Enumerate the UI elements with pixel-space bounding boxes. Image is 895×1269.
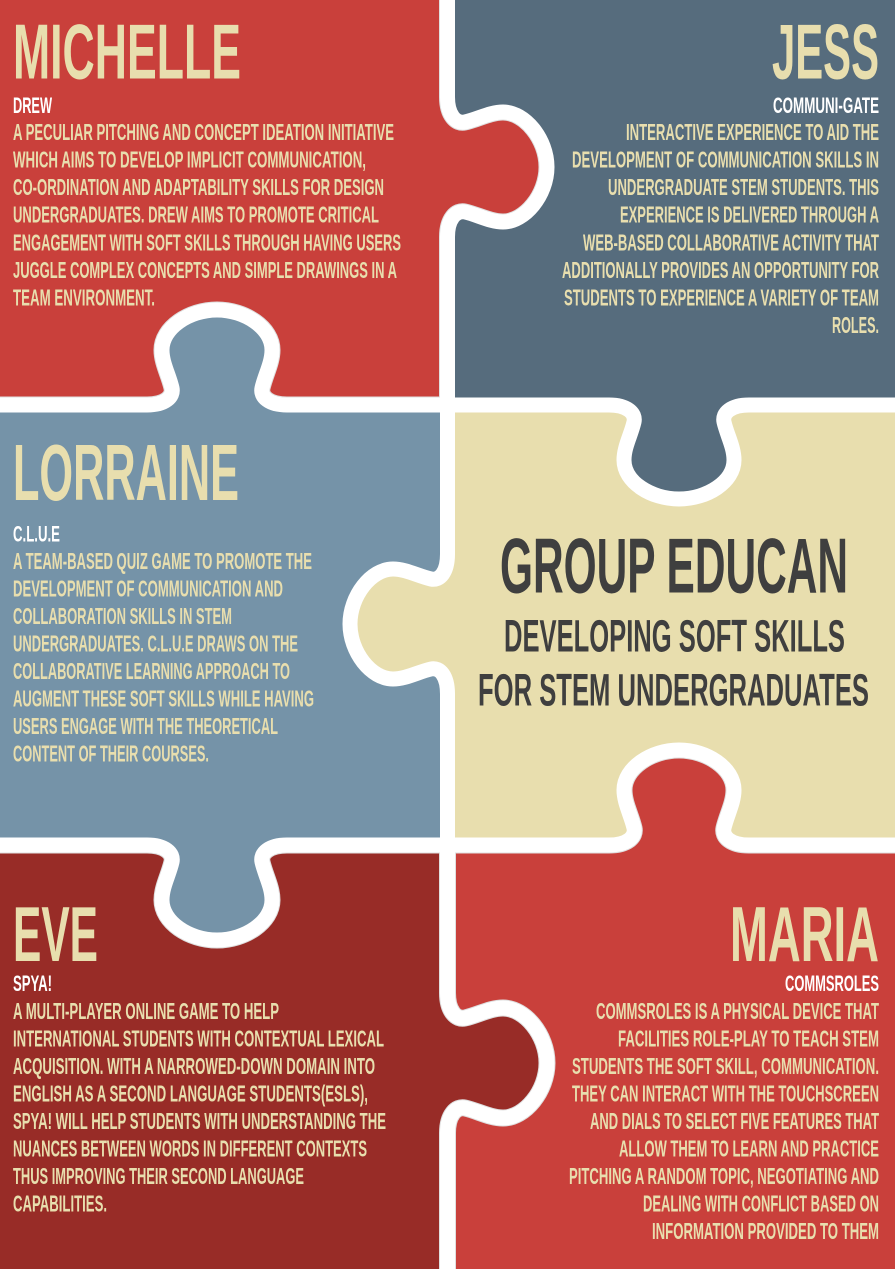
description: Drew: ENGAGEMENT WITH SOFT SKILLS THROUGH HAVING USERS	[13, 229, 401, 255]
description: Spya!	[13, 998, 386, 1216]
description: C.L.U.E: UNDERGRADUATES. C.L.U.E DRAWS ON THE	[13, 630, 298, 656]
panel: Michelle	[13, 7, 401, 310]
panel: Lorraine	[13, 428, 314, 766]
description: Spya!: ACQUISITION. WITH A NARROWED-DOWN DOMAIN INTO	[13, 1053, 375, 1079]
description: C.L.U.E: AUGMENT THESE SOFT SKILLS WHILE HAVING	[13, 686, 314, 712]
description: Drew: UNDERGRADUATES. DREW AIMS TO PROMOTE CRITICAL	[13, 202, 379, 228]
heading: Eve: EVE	[13, 890, 98, 978]
description: C.L.U.E: COLLABORATIVE LEARNING APPROACH TO	[13, 658, 290, 684]
description: Drew: A PECULIAR PITCHING AND CONCEPT IDEATION INITIATIVE	[13, 119, 394, 145]
description: Spya!: A MULTI-PLAYER ONLINE GAME TO HELP	[13, 998, 279, 1024]
description: Drew: TEAM ENVIRONMENT.	[13, 284, 155, 310]
panel: Maria	[569, 890, 879, 1244]
description: Spya!: CAPABILITIES.	[13, 1190, 107, 1216]
description: Drew: CO-ORDINATION AND ADAPTABILITY SKILLS FOR DESIGN	[13, 174, 384, 200]
description: Drew: WHICH AIMS TO DEVELOP IMPLICIT COMMUNICATION,	[13, 147, 366, 173]
piece: Michelle red	[0, 0, 547, 405]
description: Spya!: SPYA! WILL HELP STUDENTS WITH UNDERSTANDING THE	[13, 1108, 386, 1134]
project name: Spya!: SPYA!	[13, 971, 52, 996]
piece: Eve maroon	[0, 845, 547, 1269]
piece: Jess slate	[448, 0, 895, 499]
description: C.L.U.E: CONTENT OF THEIR COURSES.	[13, 740, 209, 766]
panel: Eve	[13, 890, 386, 1216]
project name: Drew: DREW	[13, 93, 52, 118]
description: Spya!: ENGLISH AS A SECOND LANGUAGE STUDENTS(ESLS),	[13, 1080, 368, 1106]
heading: Michelle: MICHELLE	[13, 7, 241, 95]
description: C.L.U.E: DEVELOPMENT OF COMMUNICATION AND	[13, 576, 283, 602]
description: C.L.U.E: A TEAM-BASED QUIZ GAME TO PROMOTE THE	[13, 548, 312, 574]
description: C.L.U.E: COLLABORATION SKILLS IN STEM	[13, 603, 232, 629]
description: Drew: JUGGLE COMPLEX CONCEPTS AND SIMPLE DRAWINGS IN A	[13, 257, 397, 283]
description: C.L.U.E: USERS ENGAGE WITH THE THEORETICAL	[13, 713, 278, 739]
piece: Maria red	[448, 750, 895, 1269]
panel: centre title	[478, 522, 869, 716]
description: Spya!: INTERNATIONAL STUDENTS WITH CONTEXTUAL LEXICAL	[13, 1026, 384, 1052]
description: Communi-Gate	[562, 119, 879, 338]
piece: Lorraine blue	[0, 310, 448, 940]
description: Spya!: NUANCES BETWEEN WORDS IN DIFFERENT CONTEXTS	[13, 1136, 367, 1162]
description: CommsRoles	[569, 998, 879, 1244]
panel: Jess	[562, 7, 879, 338]
description: Spya!: THUS IMPROVING THEIR SECOND LANGUAGE	[13, 1163, 304, 1189]
description: Drew	[13, 119, 401, 310]
piece: centre cream	[350, 405, 895, 845]
project name: C.L.U.E: C.L.U.E	[13, 522, 60, 546]
heading: Lorraine: LORRAINE	[13, 428, 239, 517]
description: C.L.U.E	[13, 548, 314, 766]
